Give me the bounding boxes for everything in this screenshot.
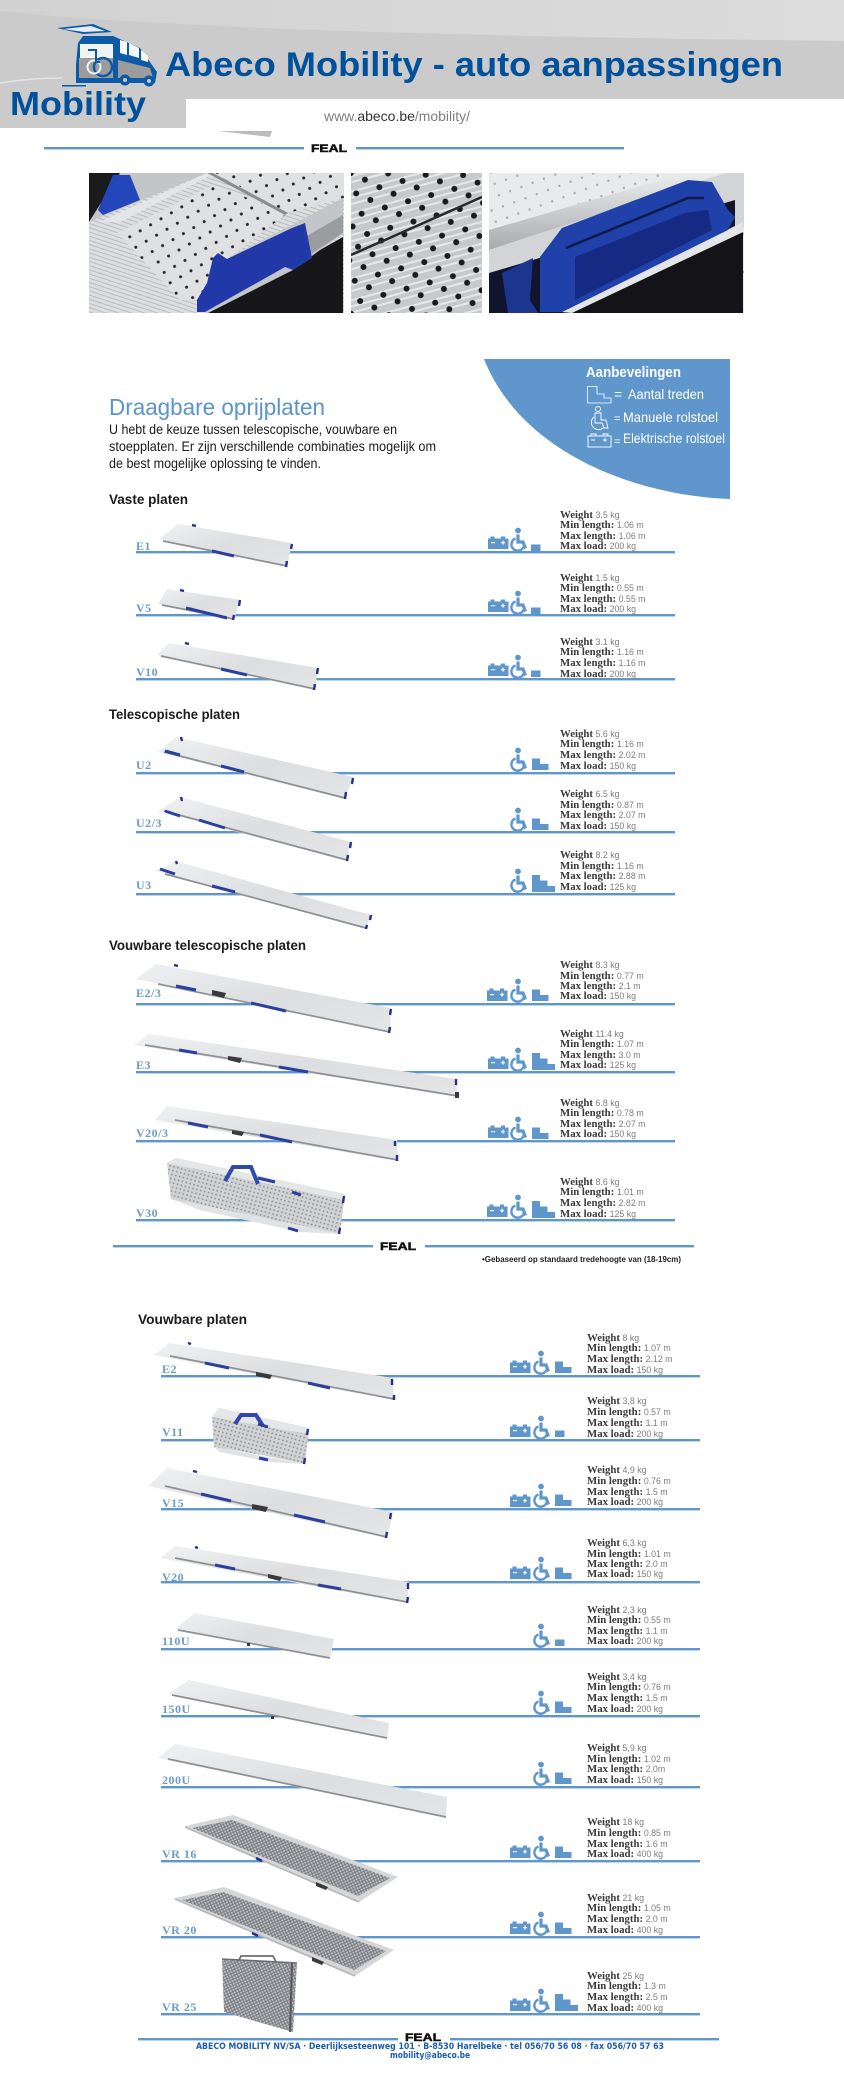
specifications: Max load: 150 kg (560, 990, 636, 1002)
legend text: Aantal treden: Aantal treden (628, 386, 704, 402)
legend text: Elektrische rolstoel: Elektrische rolstoel (623, 430, 725, 446)
model label: VR 20 (162, 1923, 197, 1937)
ramp image (154, 1343, 394, 1400)
specifications: Max load: 150 kg (587, 1568, 663, 1580)
specifications: Max length: 1.6 m (587, 1838, 668, 1850)
specifications: Min length: 0.55 m (560, 582, 644, 594)
specifications: Max length: 1.16 m (560, 657, 646, 669)
specifications: Max load: 150 kg (560, 1128, 636, 1140)
suitability icons (534, 1624, 564, 1647)
specifications: Min length: 1.05 m (587, 1902, 671, 1914)
specifications: Weight 2,3 kg (587, 1604, 647, 1616)
specifications: Max load: 200 kg (587, 1496, 663, 1508)
ramp image (159, 524, 292, 567)
specifications: Max load: 150 kg (560, 820, 636, 832)
row: V20 (160, 1537, 700, 1603)
ramp image (158, 737, 353, 799)
suitability icons (534, 1762, 572, 1785)
specifications: Max length: 1.5 m (587, 1486, 668, 1498)
ramp image (175, 1613, 334, 1659)
suitability icons (488, 1117, 548, 1140)
specifications: Min length: 1.01 m (587, 1548, 671, 1560)
ramp image (222, 1956, 297, 2032)
specifications: Max length: 0.55 m (560, 593, 646, 605)
legend text: Manuele rolstoel: Manuele rolstoel (623, 409, 718, 425)
specifications (587, 1742, 671, 1786)
specifications: Max load: 200 kg (587, 1428, 663, 1440)
specifications: Weight 6.5 kg (560, 788, 620, 800)
model label: 110U (162, 1634, 190, 1648)
specifications: Max length: 1.06 m (560, 530, 646, 542)
specifications: Weight 4,9 kg (587, 1464, 647, 1476)
brand divider top: FEAL (311, 143, 347, 155)
specifications: Weight 3,4 kg (587, 1671, 647, 1683)
row: U2 (136, 728, 675, 799)
model label: V15 (162, 1496, 184, 1510)
heading: Vouwbare telescopische platen: Vouwbare telescopische platen (109, 937, 306, 953)
specifications: Min length: 1.02 m (587, 1753, 671, 1765)
specifications (560, 788, 646, 832)
model label: 150U (162, 1702, 191, 1716)
specifications: Min length: 0.76 m (587, 1681, 671, 1693)
row: V11 (161, 1395, 700, 1464)
specifications: Min length: 1.07 m (587, 1342, 671, 1354)
title: Abeco Mobility - auto aanpassingen (165, 46, 783, 84)
model label: V20/3 (136, 1126, 168, 1140)
specifications: Max load: 150 kg (560, 760, 636, 772)
specifications (587, 1604, 671, 1647)
specifications: Min length: 1.16 m (560, 738, 644, 750)
specifications: Max length: 2.12 m (587, 1353, 672, 1365)
suitability icons (488, 655, 540, 678)
specifications: Weight 1.5 kg (560, 572, 620, 584)
suitability icons (511, 748, 548, 771)
logo wordmark: Mobility (10, 85, 147, 122)
specifications (560, 636, 646, 680)
suitability icons (511, 869, 555, 892)
suitability icons (510, 1836, 572, 1859)
specifications: Max length: 1.1 m (587, 1625, 668, 1637)
specifications (560, 509, 646, 552)
specifications: Max length: 2.07 m (560, 1118, 646, 1130)
model label: V11 (162, 1425, 184, 1439)
suitability icons (510, 1989, 578, 2012)
brand divider middle: FEAL (380, 1241, 416, 1253)
specifications: Min length: 0.85 m (587, 1827, 671, 1839)
ramp image (175, 1887, 394, 1976)
footnote: •Gebaseerd op standaard tredehoogte van (18-19cm) (482, 1254, 681, 1264)
model label: 200U (162, 1773, 191, 1787)
specifications: Min length: 1.01 m (560, 1186, 644, 1198)
intro paragraph: de best mogelijke oplossing te vinden. (109, 455, 321, 471)
specifications: Max length: 2.82 m (560, 1197, 646, 1209)
specifications (587, 1671, 671, 1715)
intro paragraph: stoepplaten. Er zijn verschillende combinaties mogelijk om (109, 438, 436, 454)
model label: U3 (136, 878, 152, 892)
row: V15 (148, 1464, 700, 1538)
specifications: Min length: 1.07 m (560, 1038, 644, 1050)
legend equals: = (614, 413, 620, 425)
suitability icons (488, 591, 540, 614)
brand divider bottom: FEAL (405, 2032, 441, 2044)
model label: U2/3 (136, 816, 162, 830)
specifications: Min length: 0.57 m (587, 1406, 671, 1418)
model label: V5 (136, 601, 152, 615)
specifications: Min length: 0.87 m (560, 799, 644, 811)
ramp image (168, 1680, 389, 1739)
specifications: Max load: 150 kg (587, 1774, 663, 1786)
ramp image (212, 1408, 309, 1464)
model label: VR 16 (162, 1847, 197, 1861)
suitability icons (487, 979, 548, 1002)
specifications (560, 572, 646, 615)
specifications: Max length: 2.0m (587, 1763, 665, 1775)
ramp image (155, 1106, 398, 1161)
model label: E2/3 (136, 986, 161, 1000)
icon: mobility van logo (57, 24, 157, 86)
row: 150U (161, 1671, 700, 1739)
specifications: Max length: 3.0 m (560, 1049, 641, 1061)
heading: Draagbare oprijplaten: Draagbare oprijplaten (109, 394, 325, 420)
ramp image (158, 1744, 447, 1818)
panel: legend Aanbevelingen (484, 359, 730, 499)
row: VR 20 (161, 1887, 700, 1976)
row: U2/3 (136, 788, 675, 861)
model label: V20 (162, 1570, 184, 1584)
specifications: Weight 21 kg (587, 1892, 644, 1904)
header band (0, 0, 844, 128)
specifications: Max load: 400 kg (587, 1848, 663, 1860)
suitability icons (510, 1416, 564, 1439)
intro paragraph: U hebt de keuze tussen telescopische, vouwbare en (109, 421, 397, 437)
photo: perforated ramp detail (89, 173, 344, 313)
ramp fragment (218, 131, 272, 137)
model label: E3 (136, 1058, 151, 1072)
photo: blue carry handle (489, 173, 744, 313)
ramp image (134, 1034, 459, 1098)
specifications: Weight 8 kg (587, 1332, 639, 1344)
specifications: Weight 8.6 kg (560, 1176, 620, 1188)
suitability icons (487, 1195, 555, 1218)
ramp image (185, 1815, 398, 1902)
specifications (560, 849, 646, 893)
specifications: Max load: 200 kg (587, 1635, 663, 1647)
icon: stairs (588, 386, 611, 403)
specifications: Min length: 0.78 m (560, 1107, 644, 1119)
ramp image (136, 964, 391, 1033)
heading: Vaste platen: Vaste platen (109, 491, 188, 507)
specifications: Weight 3,8 kg (587, 1395, 647, 1407)
specifications: Max length: 1.1 m (587, 1417, 668, 1429)
row: VR 25 (161, 1956, 700, 2032)
heading: Vouwbare platen: Vouwbare platen (138, 1311, 247, 1327)
legend equals: = (614, 386, 622, 402)
intro paragraph (109, 421, 436, 471)
model label: E1 (136, 539, 151, 553)
legend heading: Aanbevelingen (586, 364, 681, 381)
ramp image (155, 861, 371, 929)
suitability icons (510, 1351, 572, 1374)
row: V30 (136, 1158, 675, 1234)
specifications: Min length: 1.06 m (560, 519, 644, 531)
suitability icons (510, 1484, 572, 1507)
specifications (560, 1097, 646, 1140)
specifications (587, 1332, 672, 1376)
specifications: Max length: 2.5 m (587, 1991, 668, 2003)
suitability icons (488, 1048, 555, 1071)
specifications: Max length: 2.0 m (587, 1913, 668, 1925)
specifications: Weight 8.3 kg (560, 959, 620, 971)
row: E2 (154, 1332, 700, 1400)
specifications: Max load: 125 kg (560, 881, 636, 893)
specifications: Max length: 2.88 m (560, 870, 646, 882)
specifications (587, 1970, 668, 2014)
model label: V30 (136, 1206, 158, 1220)
specifications: Min length: 1.16 m (560, 860, 644, 872)
ramp image (157, 643, 318, 690)
specifications: Max load: 125 kg (560, 1059, 636, 1071)
specifications: Max load: 200 kg (560, 603, 636, 615)
specifications: Weight 18 kg (587, 1816, 644, 1828)
specifications: Max load: 150 kg (587, 1364, 663, 1376)
ramp image (160, 1546, 409, 1603)
specifications: Weight 11.4 kg (560, 1028, 624, 1040)
specifications: Min length: 1.16 m (560, 646, 644, 658)
footer contact details (196, 2042, 664, 2061)
specifications (560, 728, 646, 772)
specifications: Weight 6,3 kg (587, 1537, 647, 1549)
specifications: Max length: 2.0 m (587, 1558, 668, 1570)
icon: battery (588, 434, 611, 447)
specifications: Min length: 0.76 m (587, 1475, 671, 1487)
model label: U2 (136, 758, 152, 772)
specifications (587, 1395, 671, 1440)
row: VR 16 (161, 1815, 700, 1902)
row: 200U (158, 1742, 700, 1818)
footer contact details: mobility@abeco.be (390, 2051, 470, 2061)
specifications: Weight 8.2 kg (560, 849, 620, 861)
photo: perforation close-up (351, 173, 482, 313)
specifications: Min length: 0.55 m (587, 1614, 671, 1626)
model label: E2 (162, 1362, 177, 1376)
suitability icons (510, 1912, 572, 1935)
specifications: Max load: 200 kg (560, 668, 636, 680)
specifications (587, 1816, 671, 1860)
specifications: Max load: 400 kg (587, 1924, 663, 1936)
specifications: Max length: 2.1 m (560, 980, 641, 992)
row: 110U (161, 1604, 700, 1659)
suitability icons (511, 808, 548, 831)
ramp image (158, 589, 240, 620)
specifications (560, 1176, 646, 1220)
specifications: Max load: 200 kg (560, 540, 636, 552)
specifications: Weight 25 kg (587, 1970, 644, 1982)
specifications: Min length: 1.3 m (587, 1980, 666, 1992)
specifications: Max load: 400 kg (587, 2002, 663, 2014)
specifications (587, 1537, 671, 1580)
icon: manual wheelchair (591, 406, 608, 430)
row: V5 (136, 572, 675, 620)
specifications (587, 1892, 671, 1936)
model label: V10 (136, 665, 158, 679)
footer contact details: ABECO MOBILITY NV/SA · Deerlijksesteenweg 101 · B-8530 Harelbeke · tel 056/70 56 08 · fax 056/70 57 63 (196, 2042, 664, 2052)
model label: VR 25 (162, 2000, 197, 2014)
row: U3 (136, 849, 675, 929)
specifications: Weight 5,9 kg (587, 1742, 647, 1754)
heading: Telescopische platen: Telescopische platen (109, 706, 240, 722)
row: E2/3 (136, 959, 675, 1033)
specifications (587, 1464, 671, 1508)
specifications (560, 959, 644, 1002)
row: V10 (136, 636, 675, 690)
legend equals: = (614, 436, 620, 448)
specifications: Max length: 2.07 m (560, 809, 646, 821)
specifications: Max load: 125 kg (560, 1208, 636, 1220)
website url: www.abeco.be/mobility/ (323, 108, 470, 124)
ramp image (158, 797, 351, 861)
row: E3 (134, 1028, 675, 1098)
specifications (560, 1028, 644, 1071)
specifications: Weight 3.5 kg (560, 509, 620, 521)
specifications: Weight 3.1 kg (560, 636, 620, 648)
specifications: Weight 5.6 kg (560, 728, 620, 740)
suitability icons (534, 1691, 572, 1714)
specifications: Max length: 1.5 m (587, 1692, 668, 1704)
row: V20/3 (136, 1097, 675, 1161)
specifications: Max load: 200 kg (587, 1703, 663, 1715)
specifications: Weight 6.8 kg (560, 1097, 620, 1109)
suitability icons (488, 528, 540, 551)
specifications: Min length: 0.77 m (560, 970, 644, 982)
specifications: Max length: 2.02 m (560, 749, 646, 761)
ramp image (167, 1158, 345, 1234)
suitability icons (510, 1557, 572, 1580)
row: E1 (136, 509, 675, 567)
ramp image (148, 1468, 393, 1538)
